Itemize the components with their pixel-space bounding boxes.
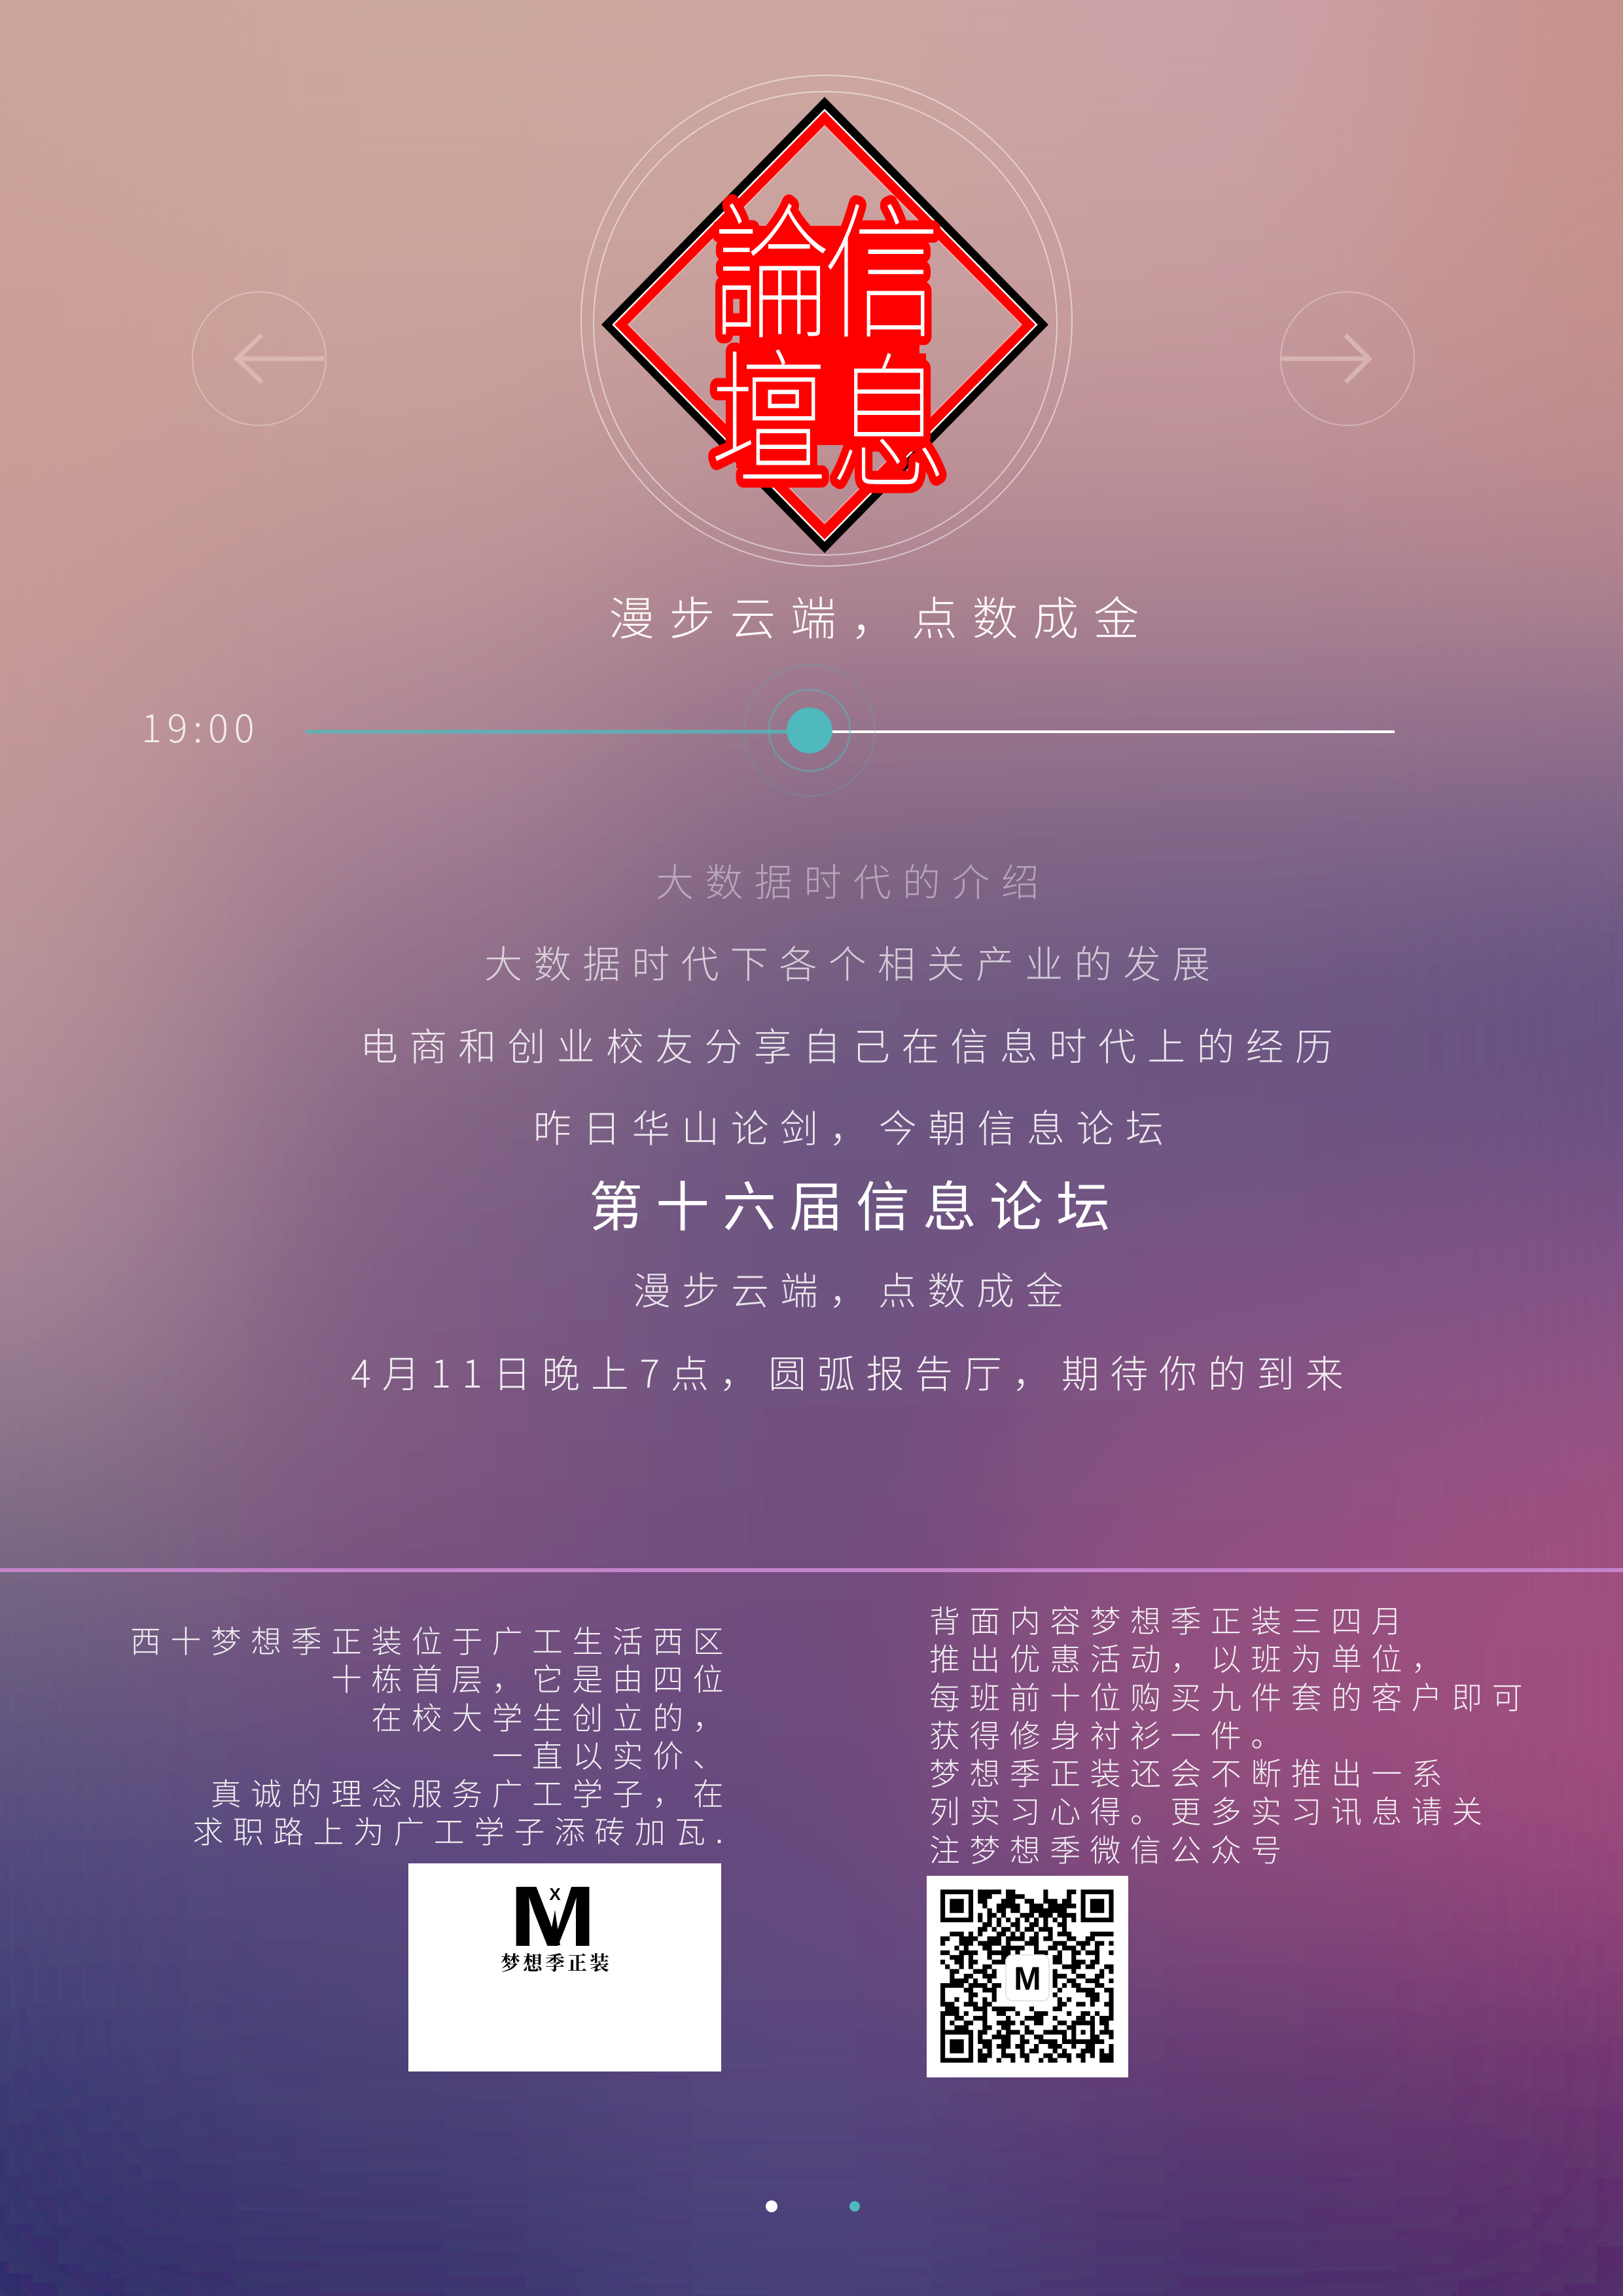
seal red backing	[736, 226, 926, 468]
seal characters: 信	[823, 194, 941, 358]
headline: 漫步云端，点数成金	[609, 594, 1154, 645]
left arrow button	[192, 292, 326, 425]
forum name highlight: 第十六届信息论坛	[589, 1178, 1123, 1238]
left description text: 真诚的理念服务广工学子，在	[211, 1777, 733, 1812]
logo rings	[581, 75, 1072, 566]
right description text: 背面内容梦想季正装三四月	[929, 1604, 1412, 1639]
agenda line 6: 漫步云端，点数成金	[633, 1270, 1075, 1313]
agenda line 3: 电商和创业校友分享自己在信息时代上的经历	[360, 1026, 1344, 1069]
right arrow button	[1281, 292, 1414, 425]
left description text: 一直以实价、	[492, 1739, 733, 1774]
seal characters	[710, 194, 948, 509]
seal characters: 息	[830, 344, 948, 509]
right description text: 每班前十位购买九件套的客户即可	[929, 1681, 1532, 1715]
brand logo card	[408, 1863, 721, 2072]
section divider	[0, 1568, 1623, 1572]
agenda line 2: 大数据时代下各个相关产业的发展	[484, 944, 1222, 986]
forum seal logo	[601, 97, 1048, 553]
QR centre logo	[1006, 1955, 1049, 2001]
brand M mark: M	[509, 1869, 596, 1964]
time label: 19:00	[141, 698, 260, 753]
date and venue: 4月11日晚上7点，圆弧报告厅，期待你的到来	[351, 1344, 1354, 1399]
left description text: 十栋首层，它是由四位	[331, 1662, 733, 1697]
pagination dots	[766, 2200, 860, 2212]
progress bar	[306, 665, 1395, 796]
brand M mark: X	[549, 1884, 561, 1904]
agenda line 1: 大数据时代的介绍	[656, 862, 1050, 905]
right description text: 列实习心得。更多实习讯息请关	[929, 1795, 1492, 1829]
left description text: 求职路上为广工学子添砖加瓦.	[192, 1815, 733, 1850]
left description text: 西十梦想季正装位于广工生活西区	[130, 1624, 733, 1659]
seal characters: 壇	[710, 340, 828, 505]
seal diamond frame	[601, 97, 1048, 553]
right description text	[929, 1604, 1532, 1868]
QR modules	[940, 1890, 1114, 2063]
seal characters: 論	[713, 194, 831, 358]
right description text: 梦想季正装还会不断推出一系	[929, 1757, 1452, 1791]
right description text: 注梦想季微信公众号	[929, 1833, 1291, 1868]
brand name: 梦想季正装	[501, 1953, 612, 1975]
QR centre logo: M	[1014, 1960, 1041, 1997]
right description text: 推出优惠活动，以班为单位，	[929, 1642, 1452, 1677]
agenda line 4: 昨日华山论剑，今朝信息论坛	[533, 1108, 1175, 1151]
left description text: 在校大学生创立的，	[371, 1701, 733, 1736]
right description text: 获得修身衬衫一件。	[929, 1719, 1291, 1753]
agenda list	[351, 862, 1354, 1399]
QR code	[927, 1876, 1128, 2077]
left description text	[130, 1624, 733, 1850]
